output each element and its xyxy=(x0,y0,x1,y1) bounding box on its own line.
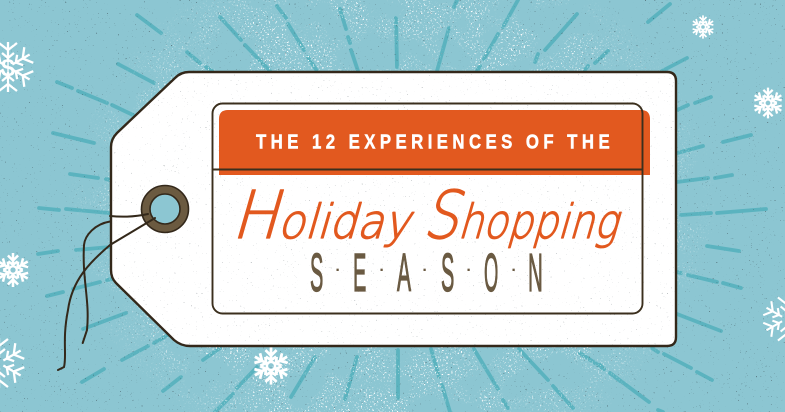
heading: season: S xyxy=(310,242,323,303)
tag body xyxy=(111,72,676,346)
inner label frame xyxy=(212,104,642,314)
snowflake: bottom xyxy=(254,349,288,383)
snowflake: right xyxy=(754,89,782,117)
snowflake: right edge xyxy=(762,296,785,342)
tag paper speckle xyxy=(112,74,675,345)
heading: season xyxy=(310,241,543,303)
heading: season: N xyxy=(528,242,543,303)
heading: season: · xyxy=(335,262,341,279)
orange title banner xyxy=(219,110,650,175)
snowflake: left xyxy=(0,254,29,286)
string xyxy=(58,214,155,370)
heading: season: · xyxy=(511,262,517,279)
heading: season: · xyxy=(422,262,428,279)
heading: the 12 experiences of the: THE 12 EXPERIENCES OF THE xyxy=(256,130,610,153)
heading: season: · xyxy=(466,262,472,279)
snowflake: top right xyxy=(692,16,714,38)
snowflake: bottom left xyxy=(0,338,25,388)
script heading: holiday shopping: Shopping xyxy=(418,176,635,254)
gift tag xyxy=(111,72,676,346)
heading: season: S xyxy=(441,242,454,303)
heading: season: E xyxy=(353,242,366,303)
heading: season: A xyxy=(397,242,411,303)
dollar sign: $ xyxy=(1,54,15,82)
heading: season: O xyxy=(484,241,498,303)
script heading: holiday shopping: Holiday xyxy=(227,176,427,254)
script heading: holiday shopping xyxy=(227,176,635,254)
heading: season: · xyxy=(379,262,385,279)
snowflake: dollar sign, top left xyxy=(0,42,34,92)
eyelet xyxy=(142,186,188,232)
